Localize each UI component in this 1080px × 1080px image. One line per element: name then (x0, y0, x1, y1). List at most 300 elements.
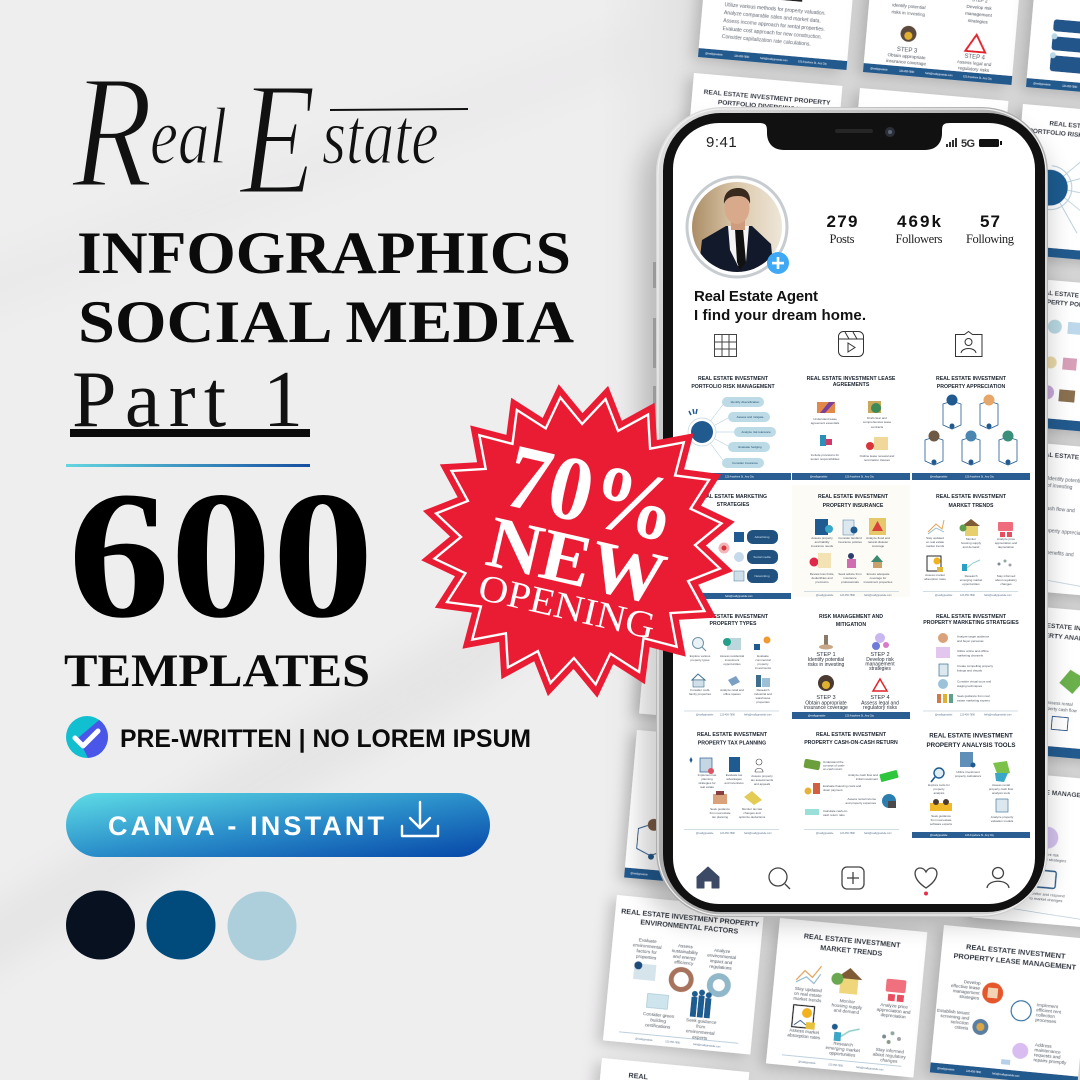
post: marketing strategies: hello@reallygreatsite.com (725, 595, 753, 598)
post: property appreciation: PROPERTY APPRECIATION (937, 384, 1005, 390)
card: left lower sliver with shield step (624, 730, 785, 890)
card: property valuation bullets: 123 Anywhere St., Any City (798, 60, 828, 66)
post: property analysis tools: property cash flow (989, 787, 1014, 791)
card: environmental factors: ENVIRONMENTAL FACTORS (640, 917, 739, 936)
post: property marketing strategies: PROPERTY MARKETING STRATEGIES (923, 620, 1019, 626)
card: environmental factors: from (696, 1024, 706, 1030)
post: cash-on-cash return: initial investment (856, 777, 878, 781)
post: property marketing strategies: Analyze target audience (957, 634, 990, 638)
card: risk steps: 123 Anywhere St., Any City (963, 75, 993, 81)
post: property tax planning: Implement tax (698, 773, 717, 777)
card: lease management: Develop (964, 979, 981, 986)
post: property tax planning: planning (701, 777, 713, 781)
post: marketing strategies: Advertising (755, 535, 770, 539)
post: portfolio risk management: REAL ESTATE INVESTMENT (698, 376, 769, 382)
nav icon: search (769, 868, 790, 889)
feature line with check icon (66, 716, 530, 758)
card: risk steps: risks in investing (891, 9, 926, 17)
card: top right blue list: @reallygreatsite (1033, 82, 1051, 87)
card: environmental factors: environmental (633, 942, 662, 950)
card: portfolio diversification: PORTFOLIO DIVERSIFICATION (718, 99, 815, 115)
post: marketing strategies: REAL ESTATE MARKETING (699, 494, 767, 500)
post: lease agreements: 123 Anywhere St., Any City (845, 476, 875, 478)
post: cash-on-cash return: REAL ESTATE INVESTMENT (816, 732, 887, 738)
post: risk management and mitigation: Develop risk (866, 657, 894, 663)
script title: Real Estate (71, 41, 468, 229)
card: property valuation bullets: @reallygreatsite (705, 52, 723, 57)
post: lease agreements: Include provisions for (811, 453, 839, 457)
post: cash-on-cash return (803, 732, 899, 835)
nav icon: add (842, 867, 864, 889)
card: risk steps: Assess legal and (957, 59, 992, 67)
post: lease agreements: agreement essentials (811, 421, 840, 425)
post: risk management and mitigation: RISK MANAGEMENT AND (819, 614, 883, 620)
big number: 600: 600 (68, 455, 374, 656)
post: risk management and mitigation: STEP 3 (816, 695, 836, 701)
hub diagram: Analyze risk tolerance (741, 430, 771, 434)
post: risk management and mitigation: risks in investing (808, 662, 845, 668)
post: market trends: depreciation (998, 545, 1014, 549)
post: property tax planning: Monitor tax law (742, 807, 763, 811)
card: risk steps: 123-456-7890 (899, 70, 915, 74)
post: property analysis tools: Assess rental (992, 783, 1010, 787)
card: market trends: Analyze price (880, 1002, 909, 1010)
post: property tax planning: PROPERTY TAX PLANNING (698, 740, 766, 746)
card: environmental factors: REAL ESTATE INVESTMENT PROPERTY (621, 906, 760, 929)
post: cash-on-cash return: hello@reallygreatsite.com (864, 832, 892, 835)
post: property analysis tools (912, 732, 1030, 838)
post: lease agreements: Understand lease (813, 417, 837, 421)
card: right benefits list: of investing (1047, 483, 1073, 491)
post: lease agreements: Outline lease renewal and (860, 454, 895, 458)
post: risk management and mitigation: @reallygreatsite (808, 714, 826, 718)
post: market trends: REAL ESTATE INVESTMENT (936, 494, 1007, 500)
post: property types: family properties (689, 692, 712, 696)
post: property insurance: @reallygreatsite (816, 594, 834, 597)
post: risk management and mitigation: STEP 1 (816, 652, 836, 658)
post: property types: Explore various (690, 654, 711, 658)
script title: Real Estate: eal (150, 90, 227, 181)
post: property insurance: hello@reallygreatsite.com (864, 594, 892, 597)
post: market trends: @reallygreatsite (935, 594, 953, 597)
hub diagram: Identify diversification (731, 400, 760, 404)
post: lease agreements: AGREEMENTS (833, 382, 870, 388)
tab icon: tagged (956, 332, 982, 356)
card: market trends: Research (833, 1041, 854, 1048)
card: lease management: @reallygreatsite (937, 1067, 955, 1072)
post: risk management and mitigation: insurance coverage (804, 705, 848, 711)
profile bio: Real Estate Agent (694, 288, 818, 305)
post: property tax planning (684, 732, 779, 835)
post: cash-on-cash return: concept of cash- (823, 764, 845, 768)
phone shadow (640, 125, 1050, 925)
card: environmental factors: environmental (707, 952, 736, 960)
card: lease management: screening and (940, 1013, 970, 1021)
card: lease management (930, 925, 1080, 1080)
hub diagram: Evaluate hedging (738, 445, 762, 449)
post: market trends: Stay updated (926, 536, 944, 540)
post: property types: property (757, 662, 769, 666)
card: risk steps: STEP 3 (897, 47, 918, 55)
card: market trends: on real estate (794, 991, 822, 998)
post: portfolio risk management: PORTFOLIO RISK MANAGEMENT (691, 384, 775, 390)
card: environmental factors: building (650, 1017, 667, 1024)
post: property types: @reallygreatsite (696, 714, 714, 716)
post: property analysis tools: Seek guidance (931, 814, 951, 818)
post: lease agreements (792, 376, 910, 480)
post: market trends: appreciation and (995, 541, 1017, 545)
post: property marketing strategies: estate marketing experts (957, 698, 990, 702)
post: property appreciation: 123 Anywhere St., Any City (965, 476, 995, 478)
script title: Real Estate: state (322, 91, 439, 181)
card: blank center (847, 88, 1008, 250)
post: market trends: MARKET TRENDS (949, 503, 994, 509)
card: environmental factors: Seek guidance (686, 1017, 717, 1025)
card: market trends: about regulatory (873, 1052, 907, 1060)
post: property types: hello@reallygreatsite.com (744, 714, 772, 716)
post: market trends: about regulatory (995, 578, 1017, 582)
post: property tax planning: Evaluate tax (726, 773, 743, 777)
card: bottom partial (596, 1058, 749, 1080)
post: market trends: absorption rates (924, 577, 946, 581)
badge text: OPENING (474, 566, 659, 648)
card: market trends: emerging market (825, 1045, 861, 1053)
card: property valuation bullets: hello@reallygreatsite.com (760, 57, 788, 62)
card: lease management: Address (1035, 1042, 1053, 1049)
post: lease agreements: Draft clear and (867, 416, 887, 420)
post: market trends (923, 494, 1018, 597)
post: risk management and mitigation: regulatory risks (863, 705, 897, 711)
post: risk management and mitigation: STEP 2 (870, 652, 890, 658)
card: environmental factors: experts (692, 1034, 708, 1041)
card: lease management: effective lease (951, 983, 981, 991)
card: right portfolio analysis (1002, 277, 1080, 437)
badge text: 70% (497, 424, 687, 562)
post: lease agreements: REAL ESTATE INVESTMENT LEASE (807, 376, 896, 382)
card: market trends: Stay updated (795, 986, 822, 993)
subheading: part 1: Part 1 (72, 356, 303, 444)
card: right market risk: N (1040, 799, 1046, 806)
phone side buttons (653, 262, 656, 436)
post: lease agreements: termination clauses (864, 458, 890, 462)
card: risk steps: strategies (968, 18, 989, 25)
post: property types: investments (755, 666, 771, 670)
post: property insurance: professionals (841, 580, 859, 584)
nav icon: profile (987, 868, 1009, 888)
post: portfolio risk management: 123 Anywhere St., Any City (725, 476, 755, 478)
post: property insurance: investment properties (864, 580, 893, 584)
post: property tax planning: tax planning (712, 815, 728, 819)
card: right market risk (972, 770, 1080, 930)
post: property insurance: coverage (872, 544, 885, 548)
post: market trends: opportunities (962, 582, 980, 586)
post: cash-on-cash return: and property expenses (845, 801, 876, 805)
post: property types: industrial and (754, 692, 772, 696)
post: risk management and mitigation (792, 614, 910, 719)
card: right portfolio risk (1010, 104, 1080, 266)
card: risk steps: regulatory risks (958, 65, 990, 73)
card: environmental factors: sustainability (672, 948, 699, 956)
hub diagram: Assess and mitigate (737, 415, 764, 419)
post: property analysis tools: analysis (934, 791, 945, 795)
post: property types (684, 614, 779, 716)
card: left upper sliver (639, 566, 800, 726)
post: market trends: hello@reallygreatsite.com (984, 594, 1012, 597)
profile bio: I find your dream home. (694, 307, 866, 324)
card: property valuation bullets: Analyze comparable sales and market data. (724, 10, 821, 25)
post: property analysis tools: property calculators (955, 774, 982, 778)
card: risk steps: management (965, 11, 993, 18)
post: property tax planning: Assess property (751, 774, 773, 778)
card: risk steps: identify potential (892, 2, 926, 10)
card: environmental factors: properties (636, 954, 657, 961)
post: property tax planning: from real estate (710, 811, 731, 815)
hub diagram (688, 397, 776, 468)
post: property types: property types (690, 658, 710, 662)
post: property tax planning: hello@reallygreatsite.com (744, 832, 772, 835)
post: property appreciation: REAL ESTATE INVESTMENT (936, 376, 1007, 382)
card: portfolio diversification (681, 73, 842, 235)
post: property tax planning: and appeals (754, 782, 771, 786)
badge text: NEW (480, 501, 673, 621)
post: property types: PROPERTY TYPES (710, 621, 757, 627)
post: cash-on-cash return: @reallygreatsite (816, 832, 834, 835)
card: right analysis tools: property cash flow (1041, 705, 1078, 714)
post: property analysis tools: valuation models (991, 819, 1014, 823)
post: lease agreements: contracts (871, 425, 884, 429)
post: property analysis tools: Utilize investment (956, 770, 980, 774)
post: cash-on-cash return: PROPERTY CASH-ON-CASH RETURN (804, 740, 898, 746)
profile stats: 469k (897, 212, 942, 231)
post: property insurance: natural disaster (868, 540, 888, 544)
post: property tax planning: strategies for (698, 781, 716, 785)
card: environmental factors: regulations (709, 964, 733, 971)
heading: infographics social media: INFOGRAPHICS (77, 220, 571, 286)
notch (759, 123, 950, 150)
post: property types: Assess residential (720, 654, 744, 658)
card: market trends: Monitor (839, 998, 856, 1005)
post: lease agreements: comprehensive lease (863, 420, 892, 424)
post: property analysis tools: Explore tools for (928, 783, 950, 787)
post: property tax planning: advantages (726, 777, 742, 781)
post: marketing strategies: Social media (753, 555, 771, 559)
post: risk management and mitigation: STEP 4 (870, 695, 890, 701)
card: risk steps: insurance coverage (886, 58, 927, 66)
post: property analysis tools: from real estate (931, 818, 952, 822)
post: risk management and mitigation: Obtain appropriate (805, 700, 847, 706)
card: risk steps: Develop risk (966, 4, 993, 11)
status bar: 9:41 (706, 134, 737, 151)
post: property insurance: PROPERTY INSURANCE (823, 503, 884, 509)
post: property analysis tools: PROPERTY ANALYSIS TOOLS (926, 742, 1016, 749)
post: property marketing strategies: Utilize online and offline (957, 649, 989, 653)
post: market trends: Analyze price (997, 537, 1015, 541)
post: market trends: changes (1000, 582, 1012, 586)
post: market trends: Research (965, 574, 978, 578)
profile avatar (687, 177, 787, 277)
profile stats: 57 (980, 212, 1000, 231)
post: market trends: 123-456-7890 (960, 594, 976, 597)
post: property insurance: and liability (815, 540, 830, 544)
card: property valuation bullets (698, 0, 860, 70)
card: market trends: hello@reallygreatsite.com (856, 1066, 884, 1072)
post: property types: office spaces (723, 692, 741, 696)
post: cash-on-cash return: Evaluate financing costs and (823, 784, 862, 788)
post: property insurance: deductibles and (811, 576, 833, 580)
post: risk management and mitigation: MITIGATION (836, 622, 866, 628)
post: property tax planning: optimize deductions (739, 815, 766, 819)
post: property marketing strategies: Create compelling property (957, 664, 994, 668)
post: property insurance (792, 485, 910, 597)
card: market trends (766, 918, 927, 1078)
card: market trends: Stay informed (875, 1047, 905, 1055)
card: market trends: MARKET TRENDS (820, 943, 883, 958)
colour palette (66, 890, 296, 960)
card: environmental factors: Evaluate (639, 937, 657, 944)
post: market trends: emerging market (960, 578, 982, 582)
card: top right blue list: 123-456-7890 (1062, 85, 1078, 89)
card: right market risk: Monitor and respond (1028, 890, 1065, 898)
status bar (706, 134, 1002, 151)
card: lease management: 123-456-7890 (966, 1070, 982, 1074)
post: marketing strategies: Networking (754, 574, 770, 578)
post: risk management and mitigation: strategies (869, 666, 891, 672)
button: canva instant: CANVA - INSTANT (108, 811, 384, 841)
gradient rule (66, 464, 310, 467)
post: property tax planning: @reallygreatsite (696, 832, 714, 835)
feature line with check icon: PRE-WRITTEN | NO LOREM IPSUM (120, 725, 531, 753)
card: lease management: PROPERTY LEASE MANAGEMENT (953, 951, 1077, 972)
post: cash-on-cash return: cash return ratio (823, 813, 845, 817)
post: property analysis tools: 123 Anywhere St., Any City (965, 834, 995, 837)
post: property types: warehouse (756, 696, 771, 700)
post: property insurance: premiums (815, 580, 829, 584)
card: right analysis tools (983, 603, 1080, 763)
icon: download (402, 802, 438, 836)
post: cash-on-cash return: Assess rental income (847, 797, 876, 801)
post: property types: Evaluate (757, 654, 769, 658)
post: property tax planning: REAL ESTATE INVESTMENT (697, 732, 768, 738)
post: property analysis tools: property (933, 787, 945, 791)
card: portfolio diversification: REAL ESTATE INVESTMENT PROPERTY (703, 89, 831, 107)
post: property tax planning: changes and (743, 811, 761, 815)
post: property appreciation (912, 376, 1030, 480)
card: right benefits list: Tax benefits and (1037, 549, 1074, 558)
post: lease agreements: tenant responsibilities (811, 457, 840, 461)
card: market trends: housing supply (831, 1002, 863, 1010)
card: environmental factors: @reallygreatsite (635, 1037, 653, 1042)
card: lease management: management (953, 988, 981, 996)
post: cash-on-cash return: down payment (823, 788, 843, 792)
card: lease management: Implement (1037, 1002, 1059, 1009)
profile stats: Posts (830, 232, 855, 246)
card: risk steps (863, 0, 1025, 85)
script title: Real Estate: E (238, 49, 316, 229)
card: market trends: and demand (833, 1008, 860, 1015)
profile stats (826, 212, 1015, 246)
heading: infographics social media: SOCIAL MEDIA (78, 289, 574, 355)
card: right benefits list (992, 440, 1080, 600)
post: cash-on-cash return: Calculate cash-on- (823, 809, 848, 813)
card: market trends: changes (880, 1057, 898, 1064)
post: property insurance: Consider landlord (838, 536, 862, 540)
post: property tax planning: Seek guidance (710, 807, 730, 811)
nav icon: heart (915, 868, 937, 888)
post: property tax planning: and incentives (724, 781, 744, 785)
icon: check badge (66, 716, 108, 758)
card: risk steps: STEP 4 (964, 54, 986, 62)
post: property types: 123-456-7890 (720, 714, 736, 716)
card: lease management: hello@reallygreatsite.com (992, 1072, 1020, 1078)
card: market trends: opportunities (829, 1050, 856, 1058)
post: property insurance: Review loss limits, (810, 572, 834, 576)
badge text (473, 423, 692, 648)
card: lease management: processes (1035, 1017, 1057, 1024)
post: property marketing strategies: Consider virtual tours and (957, 680, 992, 684)
post: property analysis tools: Analyze property (991, 815, 1014, 819)
card: environmental factors: impact and (710, 958, 733, 965)
post: property marketing strategies: @reallygreatsite (935, 714, 953, 716)
post: property insurance: Ensure adequate (867, 572, 890, 576)
post: property marketing strategies (923, 614, 1019, 716)
card: environmental factors: certifications (645, 1022, 671, 1030)
post: property tax planning: tax assessments (751, 778, 774, 782)
background template cards (596, 0, 1080, 1080)
post: property tax planning: 123-456-7890 (720, 832, 736, 835)
card: left lower sliver with shield step: @reallygreatsite (630, 872, 649, 877)
post: property insurance: Analyze flood and (866, 536, 890, 540)
card: right market risk: to market changes (1029, 895, 1063, 903)
post: risk management and mitigation: management (865, 662, 895, 668)
card: lease management: efficient rent (1036, 1007, 1062, 1015)
post: property types: opportunities (723, 662, 741, 666)
bottom navigation (697, 867, 1009, 896)
card: market trends: appreciation and (876, 1007, 911, 1015)
card: environmental factors (603, 895, 764, 1055)
add story button (767, 252, 789, 274)
card: risk steps: @reallygreatsite (870, 67, 888, 72)
post: risk management and mitigation: Assess legal and (861, 700, 899, 706)
card: environmental factors: factors for (636, 948, 658, 955)
post: risk management and mitigation: 123 Anywhere St., Any City (845, 714, 875, 718)
card: lease management: REAL ESTATE INVESTMENT (966, 942, 1066, 961)
post: property types: Analyze retail and (720, 688, 744, 692)
post: property marketing strategies: marketing channels (957, 654, 984, 658)
nav icon: home (697, 867, 719, 888)
card: market trends: @reallygreatsite (798, 1060, 816, 1065)
post: risk management and mitigation: Identify potential (808, 657, 844, 663)
card: risk steps: hello@reallygreatsite.com (925, 72, 953, 77)
post: property marketing strategies: staging techniques (957, 684, 983, 688)
card: environmental factors: 123-456-7890 (665, 1040, 681, 1045)
card: lease management: collection (1036, 1012, 1056, 1019)
discount starburst badge (421, 384, 735, 698)
post: market trends: Stay informed (997, 574, 1016, 578)
post: property insurance: insurance (843, 576, 857, 580)
tab icon: grid (714, 334, 737, 357)
card: property valuation bullets: Assess income approach for rental properties. (723, 18, 825, 33)
status bar: 5G (961, 138, 975, 150)
post: market trends: market trends (926, 544, 945, 548)
post: property marketing strategies: REAL ESTATE INVESTMENT (936, 614, 1007, 620)
profile bio (694, 288, 866, 324)
post: property marketing strategies: Seek guidance from real (957, 694, 990, 698)
card: right market risk: management strategies (1024, 855, 1067, 863)
card: right benefits list: Cash flow and (1043, 506, 1075, 514)
post: property marketing strategies: and buyer personas (957, 639, 984, 643)
card: environmental factors: efficiency (674, 959, 694, 966)
post: property types: Research (757, 688, 770, 692)
